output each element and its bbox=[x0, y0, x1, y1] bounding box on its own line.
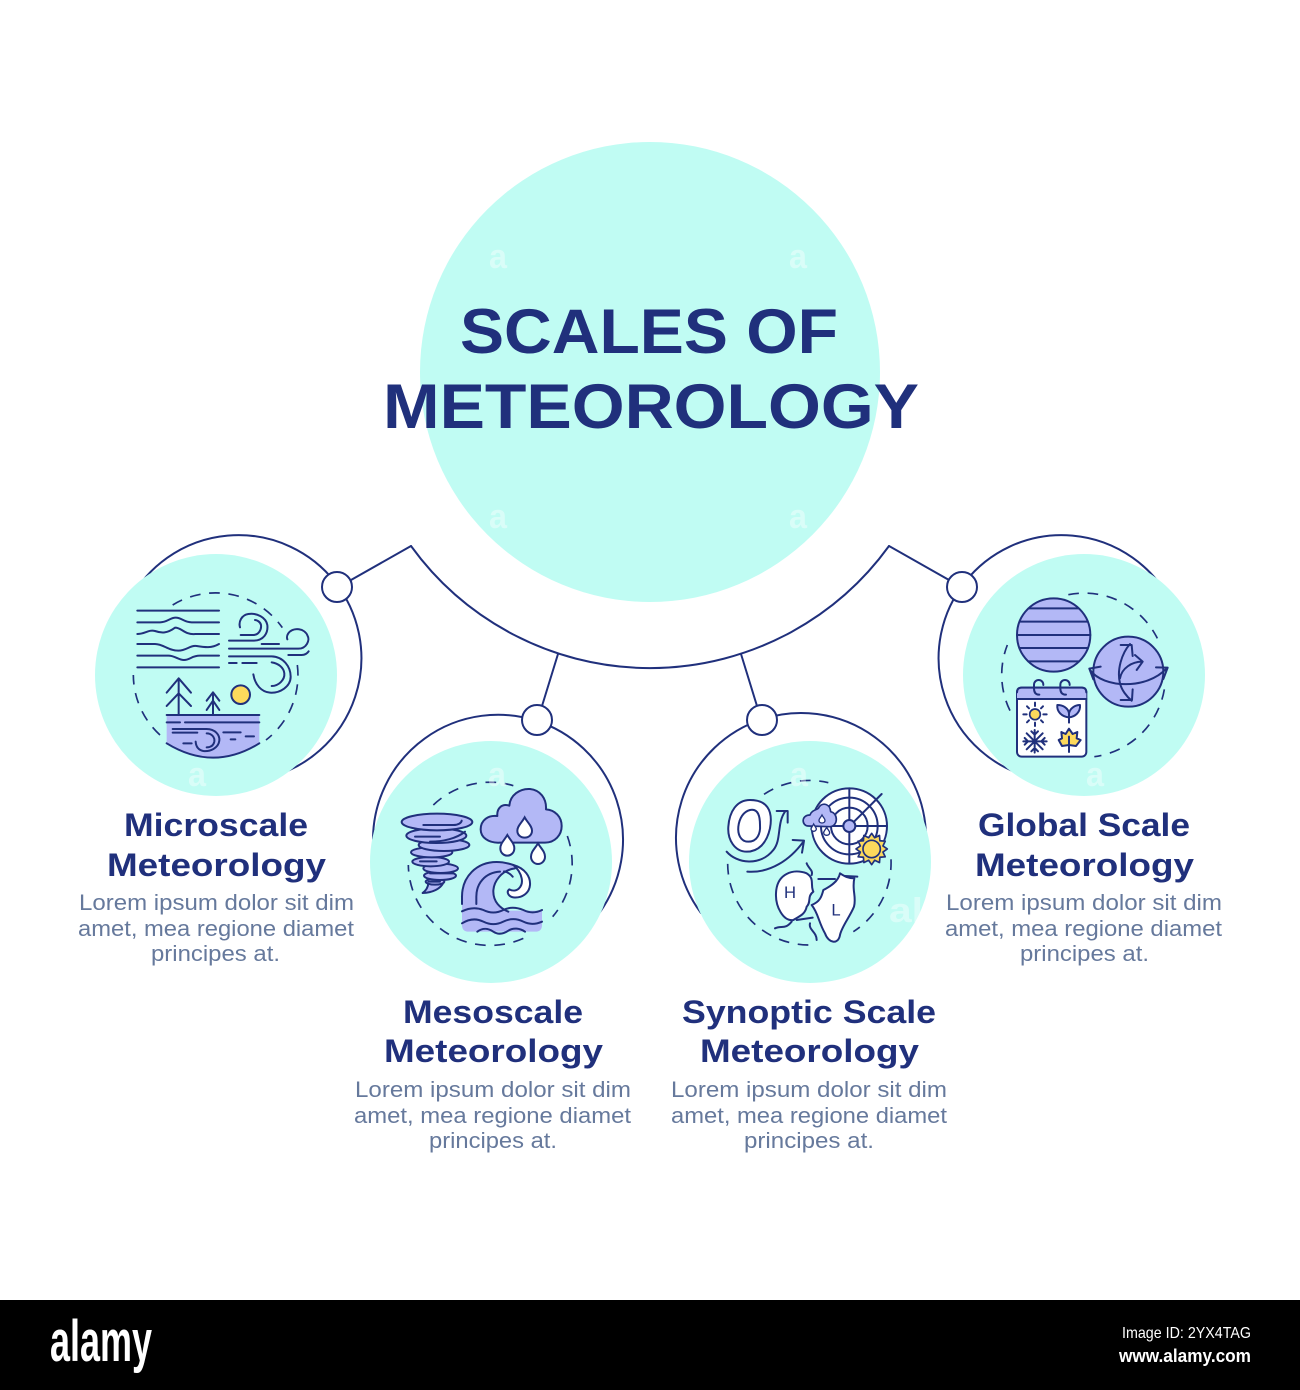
watermark marks: a bbox=[488, 756, 507, 794]
teal disc: synoptic scale bbox=[689, 741, 931, 983]
heading: mesoscale: Meteorology bbox=[384, 1033, 603, 1069]
watermark marks: a bbox=[489, 238, 508, 276]
text: global scale description: principes at. bbox=[1020, 941, 1149, 966]
heading: synoptic scale bbox=[682, 994, 936, 1069]
outline ring: mesoscale bbox=[373, 715, 623, 912]
footer image id: Image ID: 2YX4TAG bbox=[1122, 1325, 1251, 1342]
footer site url: www.alamy.com bbox=[1118, 1346, 1251, 1366]
connector node: mesoscale bbox=[522, 705, 552, 735]
watermark marks: a bbox=[789, 498, 808, 536]
text: global scale description: amet, mea regione diamet bbox=[945, 916, 1222, 941]
text: global scale description: Lorem ipsum dolor sit dim bbox=[946, 890, 1222, 915]
heading: global scale: Meteorology bbox=[975, 847, 1194, 883]
icon: globes, circulation arrows and seasonal calendar bbox=[1002, 593, 1168, 757]
text: mesoscale description bbox=[354, 1077, 631, 1153]
text: microscale description: principes at. bbox=[151, 941, 280, 966]
heading: global scale: Global Scale bbox=[978, 807, 1190, 843]
footer logo: alamy bbox=[50, 1309, 152, 1374]
watermark marks: a bbox=[489, 498, 508, 536]
heading: mesoscale: Mesoscale bbox=[403, 994, 583, 1030]
footer bar bbox=[0, 1300, 1300, 1390]
outline ring: global scale bbox=[939, 535, 1170, 777]
icon: water, wind, trees and sun bbox=[133, 593, 309, 758]
icon: pressure map, radar and sun: L bbox=[831, 901, 841, 920]
connector node: global scale bbox=[947, 572, 977, 602]
heading: microscale bbox=[107, 807, 326, 883]
watermark marks: a bbox=[790, 756, 809, 794]
central title circle bbox=[420, 142, 880, 602]
text: microscale description: Lorem ipsum dolor sit dim bbox=[79, 890, 354, 915]
connector arc and branches bbox=[351, 546, 949, 706]
icon: pressure map, radar and sun: H bbox=[784, 883, 796, 902]
heading: global scale bbox=[975, 807, 1194, 883]
panel: mesoscale bbox=[354, 705, 631, 1153]
text: mesoscale description: principes at. bbox=[429, 1128, 557, 1153]
teal disc: mesoscale bbox=[370, 741, 612, 983]
watermark marks bbox=[188, 238, 1105, 930]
teal disc: global scale bbox=[963, 554, 1205, 796]
title: SCALES OF bbox=[460, 297, 838, 367]
text: synoptic scale description: principes at. bbox=[744, 1128, 874, 1153]
title bbox=[383, 297, 919, 442]
outline ring: synoptic scale bbox=[676, 713, 926, 913]
watermark marks: a bbox=[1086, 756, 1105, 794]
icon: tornado, rain cloud and wave bbox=[402, 782, 572, 945]
text: synoptic scale description: Lorem ipsum dolor sit dim bbox=[671, 1077, 947, 1102]
title: METEOROLOGY bbox=[383, 372, 919, 442]
heading: synoptic scale: Synoptic Scale bbox=[682, 994, 936, 1030]
connector node: microscale bbox=[322, 572, 352, 602]
icon: pressure map, radar and sun bbox=[727, 780, 891, 945]
heading: microscale: Microscale bbox=[124, 807, 308, 843]
panel: global scale bbox=[939, 535, 1222, 966]
panel: microscale bbox=[78, 535, 361, 966]
text: global scale description bbox=[945, 890, 1222, 966]
connector node: synoptic scale bbox=[747, 705, 777, 735]
teal disc: microscale bbox=[95, 554, 337, 796]
heading: microscale: Meteorology bbox=[107, 847, 326, 883]
heading: synoptic scale: Meteorology bbox=[700, 1033, 919, 1069]
panel: synoptic scale bbox=[671, 705, 947, 1153]
text: mesoscale description: amet, mea regione diamet bbox=[354, 1103, 631, 1128]
watermark marks: al bbox=[889, 892, 923, 930]
watermark marks: a bbox=[188, 756, 207, 794]
outline ring: microscale bbox=[130, 535, 361, 777]
text: synoptic scale description bbox=[671, 1077, 947, 1153]
watermark marks: a bbox=[789, 238, 808, 276]
text: synoptic scale description: amet, mea regione diamet bbox=[671, 1103, 947, 1128]
text: mesoscale description: Lorem ipsum dolor sit dim bbox=[355, 1077, 631, 1102]
text: microscale description bbox=[78, 890, 354, 966]
heading: mesoscale bbox=[384, 994, 603, 1069]
text: microscale description: amet, mea regione diamet bbox=[78, 916, 354, 941]
